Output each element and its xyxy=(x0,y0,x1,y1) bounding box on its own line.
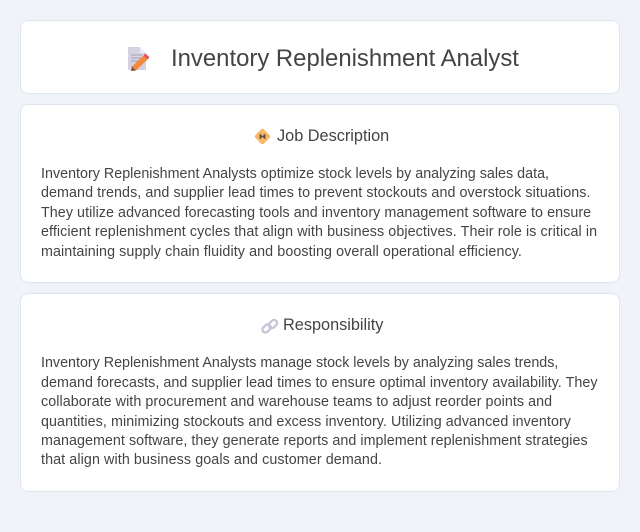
icon: document with pencil xyxy=(128,47,150,71)
text: job description xyxy=(41,166,597,260)
panel: job description xyxy=(20,104,620,283)
heading: job description: Job Description xyxy=(277,127,389,145)
card background xyxy=(20,293,620,492)
text: responsibility: that align with business goals and customer demand. xyxy=(41,452,382,468)
heading: responsibility: Responsibility xyxy=(283,316,383,334)
text: job description: maintaining supply chain fluidity and boosting overall operational efficiency. xyxy=(41,244,522,260)
text: responsibility: quantities, minimizing stockouts and excess inventory. Utilizing advanced inventory xyxy=(41,414,571,430)
text: responsibility: collaborate with procurement and warehouse teams to adjust reorder points and xyxy=(41,394,552,410)
text: job description: They utilize advanced forecasting tools and inventory management software to ensure xyxy=(41,205,591,221)
panel: title card xyxy=(20,20,620,94)
icon: chain link xyxy=(261,318,278,334)
text: responsibility xyxy=(41,355,598,468)
text: job description: efficient replenishment cycles that align with business objectives. Their role is critical in xyxy=(41,224,597,240)
panel: responsibility xyxy=(20,293,620,492)
icon: orange diamond xyxy=(254,128,270,144)
text: responsibility: Inventory Replenishment Analysts manage stock levels by analyzing sales trends, xyxy=(41,355,558,371)
text: job description: demand trends, and supplier lead times to prevent stockouts and overstock situations. xyxy=(41,185,591,201)
text: responsibility: demand forecasts, and supplier lead times to ensure optimal inventory availability. They xyxy=(41,375,598,391)
title: Inventory Replenishment Analyst xyxy=(171,45,519,72)
text: responsibility: management software, they generate reports and implement replenishment strategies xyxy=(41,433,588,449)
card background xyxy=(20,104,620,283)
text: job description: Inventory Replenishment Analysts optimize stock levels by analyzing sales data, xyxy=(41,166,549,182)
